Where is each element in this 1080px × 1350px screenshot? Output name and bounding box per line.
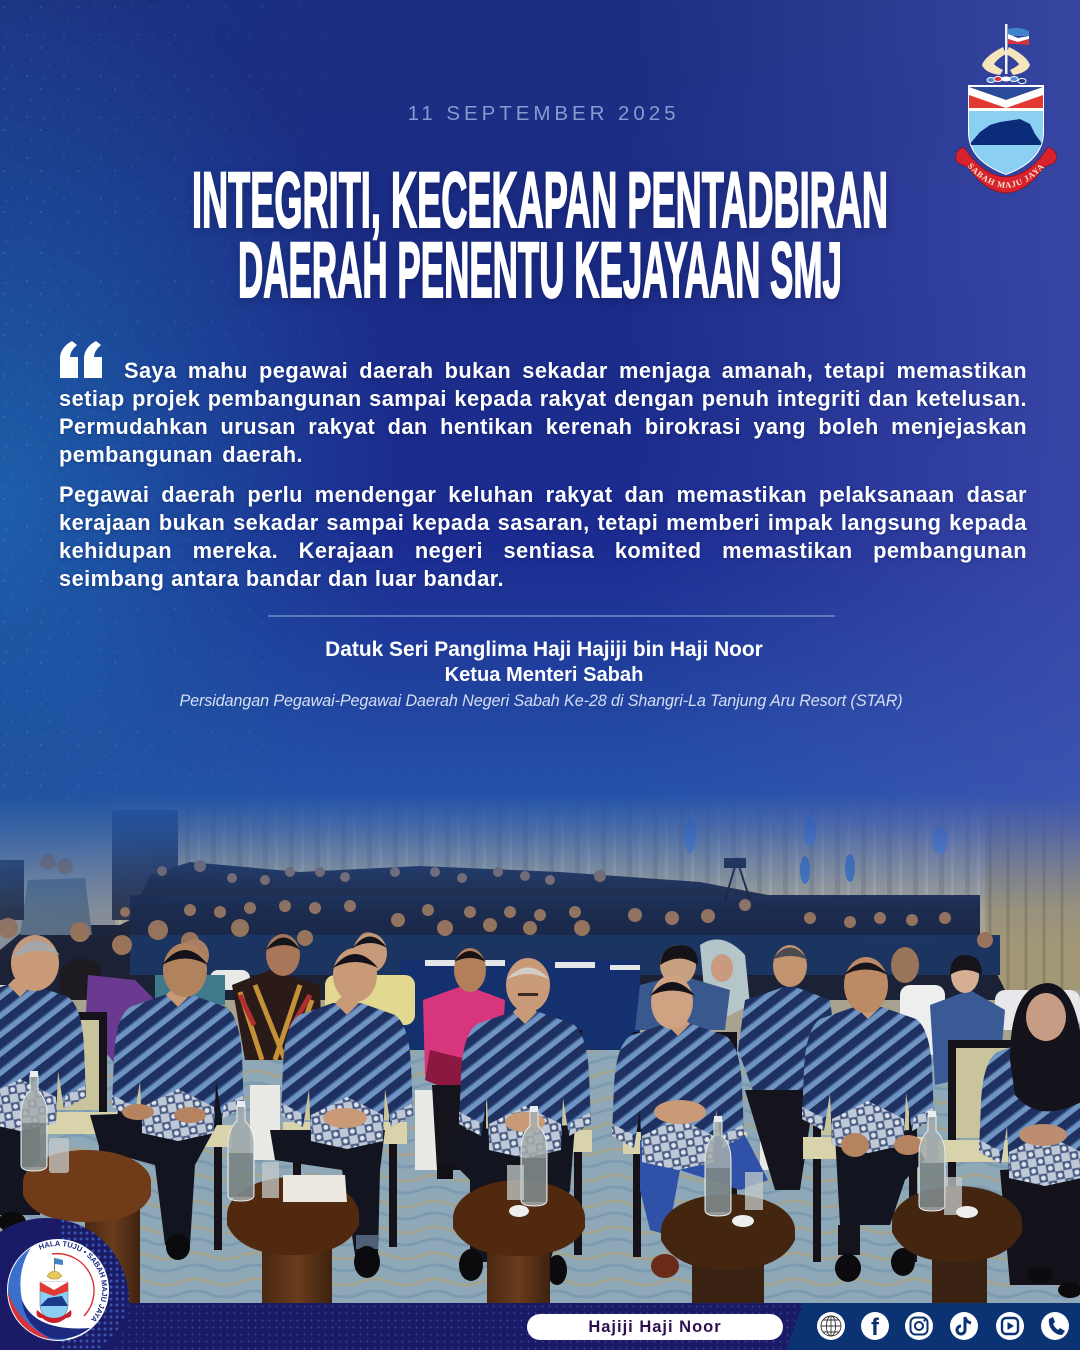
icon: quotation mark — [60, 341, 102, 378]
icon: Sabah coat of arms — [955, 24, 1057, 194]
quote text block: kehidupan mereka. Kerajaan negeri sentiasa komited memastikan pembangunan — [59, 538, 1027, 563]
icon: facebook — [861, 1312, 889, 1341]
badge: Hala Tuju Sabah Maju Jaya — [0, 1218, 129, 1350]
photo: delegates seated in the conference hall — [0, 803, 1080, 1303]
quote text block: pembangunan daerah. — [59, 442, 303, 467]
quote text block — [59, 358, 1027, 592]
date: 11 SEPTEMBER 2025 — [408, 102, 679, 125]
left side haze over wall — [0, 854, 60, 928]
name pill — [527, 1314, 783, 1340]
quote text block: Permudahkan urusan rakyat dan hentikan kerenah birokrasi yang boleh menjejaskan — [59, 414, 1027, 439]
icon: video play — [996, 1312, 1024, 1340]
carpet and curtain — [0, 780, 1080, 1310]
back rows of delegates — [0, 854, 1010, 1080]
social media icons — [817, 1312, 1069, 1341]
badge: Hala Tuju Sabah Maju Jaya: HALA TUJU • SABAH MAJU JAYA — [38, 1240, 108, 1322]
round wooden side tables — [23, 1150, 1022, 1305]
name pill: Hajiji Haji Noor — [588, 1318, 722, 1336]
bottles, glasses and papers — [21, 1071, 978, 1227]
icon: phone — [1041, 1312, 1069, 1340]
icon: Sabah coat of arms: SABAH MAJU JAYA — [968, 164, 1044, 188]
attribution: Datuk Seri Panglima Haji Hajiji bin Haji Noor — [325, 638, 763, 661]
quote text block: seimbang antara bandar dan luar bandar. — [59, 566, 504, 591]
background speckle texture — [3, 2, 450, 798]
footer bar — [113, 1303, 1080, 1350]
attribution: Persidangan Pegawai-Pegawai Daerah Negeri Sabah Ke-28 di Shangri-La Tanjung Aru Resort (STAR) — [179, 692, 903, 710]
title — [191, 160, 889, 314]
icon: facebook: f — [871, 1314, 880, 1341]
quote text block: Pegawai daerah perlu mendengar keluhan rakyat dan memastikan pelaksanaan dasar — [59, 482, 1027, 507]
quote text block: Saya mahu pegawai daerah bukan sekadar menjaga amanah, tetapi memastikan — [124, 358, 1027, 383]
quote text block: setiap projek pembangunan sampai kepada rakyat dengan penuh integriti dan ketelusan. — [59, 386, 1027, 411]
icon: website globe — [817, 1312, 845, 1340]
icon: tiktok — [950, 1312, 978, 1340]
icon: instagram — [905, 1312, 933, 1340]
front row: guests in batik shirts — [0, 935, 1080, 1298]
white chairs and second-row guests — [0, 933, 1080, 1190]
attribution: Ketua Menteri Sabah — [445, 664, 643, 686]
chairs — [0, 1012, 1062, 1265]
quote text block: kerajaan bukan sekadar sampai kepada sasaran, tetapi memberi impak langsung kepada — [59, 510, 1027, 535]
footer right panel — [786, 1303, 1080, 1350]
attribution — [179, 638, 903, 710]
